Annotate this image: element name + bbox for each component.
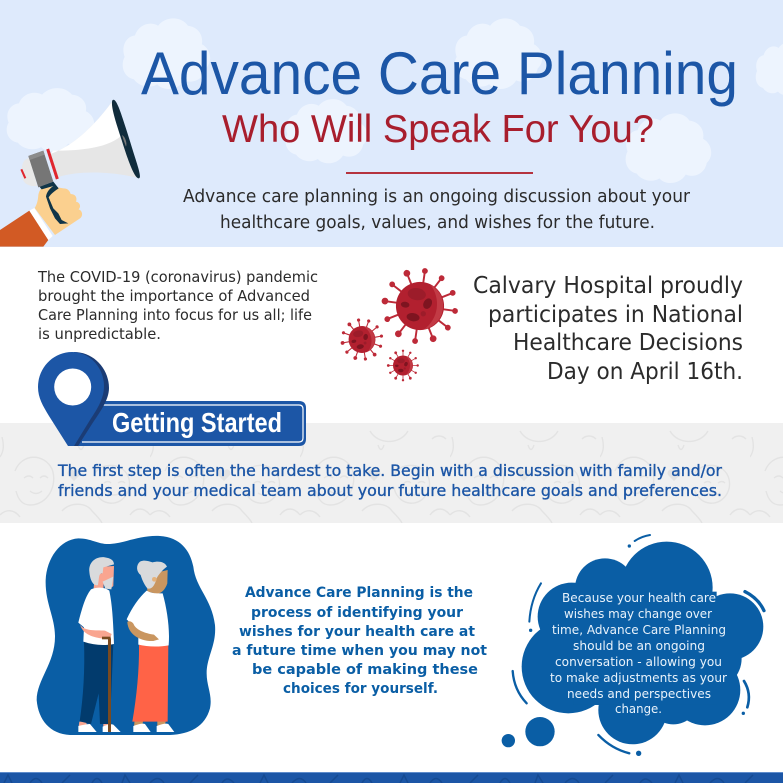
red divider: [346, 172, 533, 174]
advance care planning definition: process of identifying your: [251, 605, 464, 621]
getting started text: The first step is often the hardest to take. Begin with a discussion with family and/or: [57, 461, 722, 480]
covid text: [37, 268, 318, 343]
covid text: is unpredictable.: [38, 325, 161, 343]
icon: virus particles: [337, 263, 463, 381]
icon: megaphone: [0, 100, 140, 247]
calvary hospital text: participates in National: [488, 302, 743, 328]
man: [78, 557, 121, 732]
intro text: [183, 187, 691, 233]
thought bubble text: wishes may change over: [564, 606, 713, 621]
bottom band: [0, 772, 783, 783]
panel: getting started band: [0, 423, 783, 523]
covid text: brought the importance of Advanced: [38, 287, 310, 305]
thought bubble text: Because your health care: [562, 590, 716, 605]
header background: [0, 0, 783, 247]
getting started text: friends and your medical team about your future healthcare goals and preferences.: [58, 481, 722, 500]
calvary hospital text: [473, 273, 743, 385]
thought bubble text: [550, 590, 728, 716]
thought bubble text: conversation - allowing you: [555, 654, 722, 669]
woman: [127, 561, 174, 732]
covid text: The COVID-19 (coronavirus) pandemic: [37, 268, 318, 286]
thought bubble text: needs and perspectives: [567, 686, 711, 701]
advance care planning definition: wishes for your health care at: [239, 624, 475, 640]
getting started text: [57, 461, 722, 500]
thought bubble text: change.: [615, 701, 662, 716]
calvary hospital text: Day on April 16th.: [547, 359, 743, 385]
blue blob: [37, 536, 215, 735]
advance care planning definition: Advance Care Planning is the: [245, 585, 473, 601]
advance care planning definition: [232, 585, 487, 697]
covid text: Care Planning into focus for us all; life: [38, 306, 312, 324]
thought bubble text: should be an ongoing: [573, 638, 705, 653]
thought bubble text: time, Advance Care Planning: [552, 622, 726, 637]
calvary hospital text: Healthcare Decisions: [513, 330, 743, 356]
illustration: elderly couple: [37, 536, 215, 735]
advance care planning definition: a future time when you may not: [232, 643, 487, 659]
thought bubble: [502, 535, 764, 756]
getting started banner: [38, 352, 306, 446]
subtitle: Who Will Speak For You?: [222, 108, 654, 151]
advance care planning definition: choices for yourself.: [283, 681, 438, 697]
intro text: healthcare goals, values, and wishes for the future.: [220, 213, 655, 233]
title: Advance Care Planning: [141, 40, 738, 107]
intro text: Advance care planning is an ongoing discussion about your: [183, 187, 691, 207]
calvary hospital text: Calvary Hospital proudly: [473, 273, 743, 299]
advance care planning definition: be capable of making these: [252, 662, 478, 678]
getting started banner: Getting Started: [112, 407, 282, 438]
decorative clouds: [7, 18, 783, 183]
thought bubble text: to make adjustments as your: [550, 670, 728, 685]
